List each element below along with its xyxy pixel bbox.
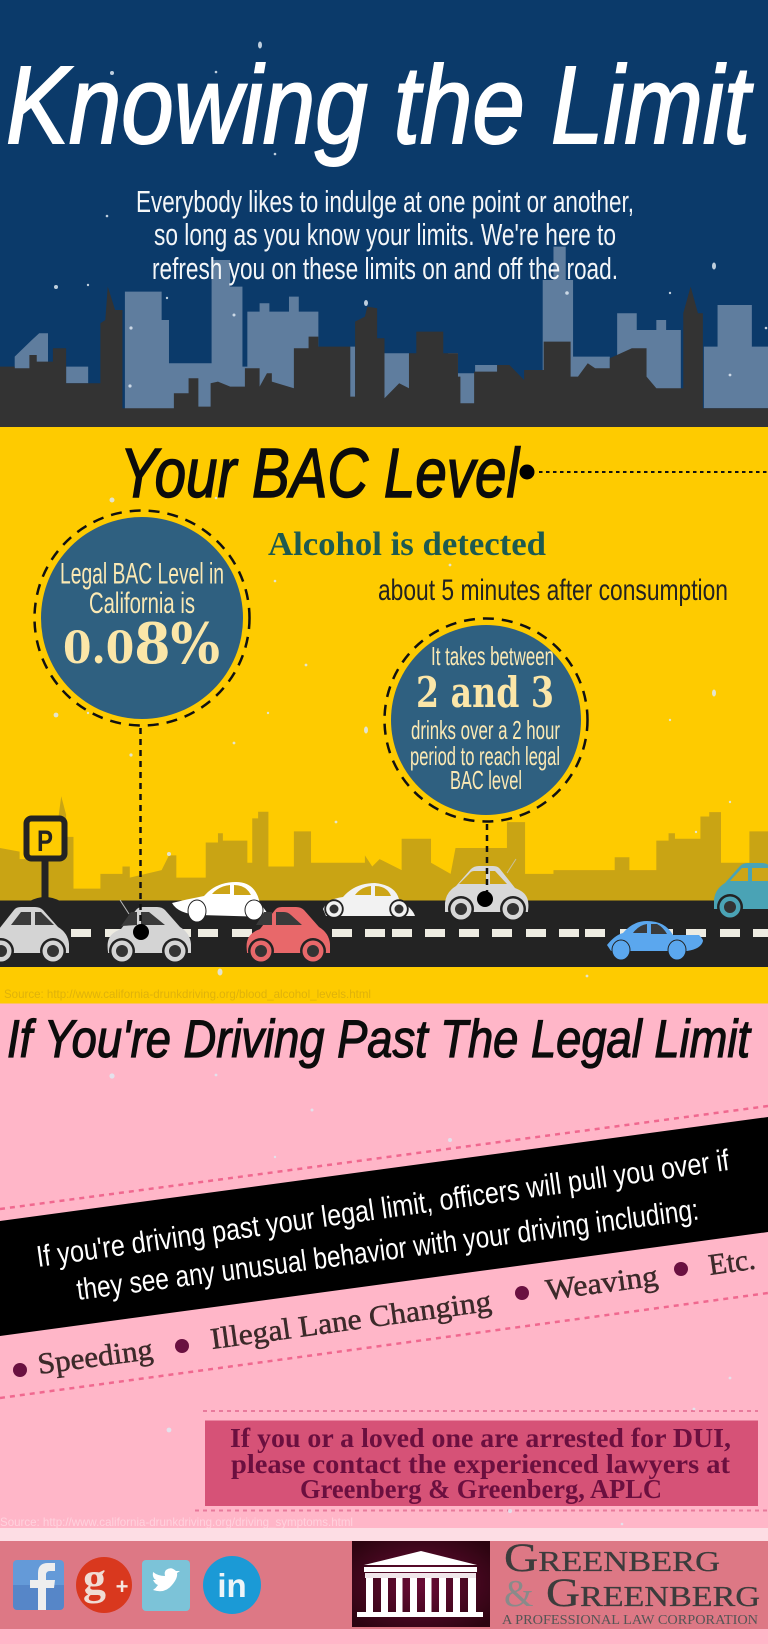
dashed rule upper <box>0 1106 768 1209</box>
dashed rule lower <box>0 1293 768 1398</box>
dark skyline <box>0 287 768 428</box>
callout: drinks: period to reach legal <box>410 741 560 771</box>
source note: BAC: Source: http://www.california-drunkdriving.org/blood_alcohol_levels.html <box>4 987 371 1001</box>
footer <box>0 1528 768 1629</box>
text: alcohol is detected: Alcohol is detected <box>268 526 546 563</box>
callout: drinks: 2 and 3 <box>416 668 554 717</box>
firm name: GREENBERG <box>504 1535 720 1580</box>
firm name: & <box>504 1573 534 1615</box>
call to action: Greenberg & Greenberg, APLC <box>300 1474 662 1504</box>
callout: legal BAC level <box>34 510 250 726</box>
logo: law firm temple <box>352 1541 490 1627</box>
list of unusual driving behaviors: Weaving <box>544 1259 660 1307</box>
icon: parking sign: P <box>37 825 53 858</box>
icon: linkedin: in <box>217 1567 247 1604</box>
connector: circle one to car <box>133 728 149 940</box>
icon: google plus: g <box>83 1553 106 1604</box>
dotted rule with dot <box>520 464 768 480</box>
panel: BAC level <box>0 427 768 1004</box>
road dashes <box>71 929 768 937</box>
car: red <box>247 907 330 964</box>
source note: symptoms: Source: http://www.california-drunkdriving.org/driving_symptoms.html <box>0 1515 353 1529</box>
icon: google plus <box>76 1553 132 1613</box>
callout: drinks: It takes between <box>431 641 554 671</box>
firm name <box>502 1535 760 1628</box>
gold skyline <box>0 796 768 903</box>
heading: Your BAC Level: Your BAC Level <box>120 434 521 512</box>
icon: linkedin <box>203 1556 261 1614</box>
callout: drinks <box>384 618 588 822</box>
icon: twitter <box>142 1560 190 1611</box>
road <box>0 900 768 967</box>
icon: google plus: + <box>116 1574 128 1599</box>
callout: legal BAC level: California is <box>89 587 195 620</box>
car: white beetle <box>172 882 268 922</box>
firm name: A PROFESSIONAL LAW CORPORATION <box>502 1613 758 1628</box>
icon: parking sign <box>26 818 64 901</box>
list of unusual driving behaviors: Etc. <box>706 1243 758 1282</box>
list of unusual driving behaviors <box>13 1243 758 1381</box>
car: gray left <box>0 907 69 964</box>
callout: legal BAC level: Legal BAC Level in <box>60 558 224 590</box>
callout: drinks: drinks over a 2 hour <box>411 715 560 745</box>
call to action: If you or a loved one are arrested for DUI, <box>230 1423 731 1453</box>
icon: facebook <box>13 1560 64 1610</box>
call to action: please contact the experienced lawyers at <box>231 1449 730 1479</box>
list of unusual driving behaviors: Speeding <box>36 1333 155 1381</box>
callout: drinks: BAC level <box>450 765 522 795</box>
panel: past the limit <box>0 1004 768 1644</box>
panel: night sky header <box>0 0 768 428</box>
intro text: so long as you know your limits. We're here to <box>154 217 616 252</box>
call to action <box>195 1411 768 1510</box>
car: white small <box>323 883 415 919</box>
callout: legal BAC level: 0.08% <box>63 611 220 677</box>
intro text <box>136 184 634 286</box>
list of unusual driving behaviors: Illegal Lane Changing <box>208 1285 493 1356</box>
car: gray right <box>445 859 528 922</box>
black banner <box>0 1117 768 1336</box>
car: blue <box>607 921 703 960</box>
light skyline <box>15 247 768 410</box>
connector: circle two to car <box>477 824 493 907</box>
car: gray center-left <box>108 900 191 964</box>
firm name: GREENBERG <box>546 1570 760 1615</box>
car: teal <box>714 863 768 920</box>
